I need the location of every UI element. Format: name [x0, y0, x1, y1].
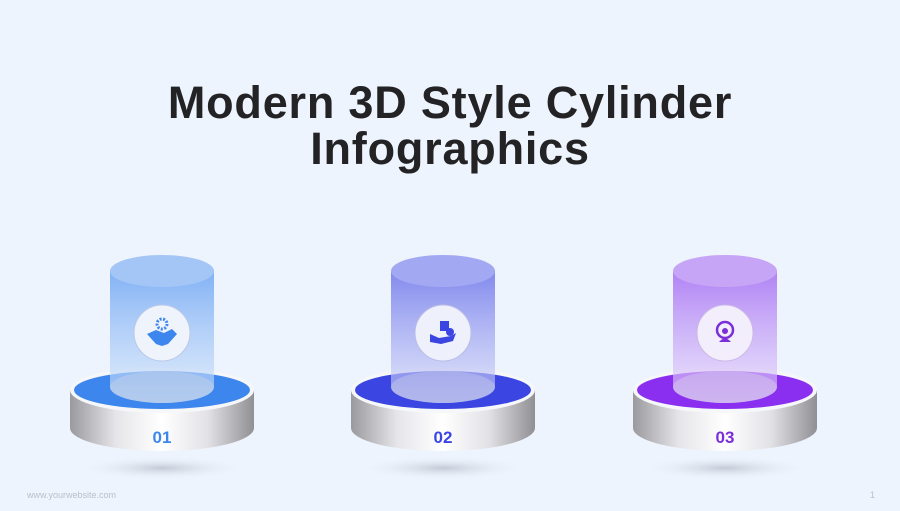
number 03: 03	[716, 428, 734, 447]
cylinder 01	[70, 255, 254, 480]
title	[168, 77, 732, 174]
cylinder 02	[351, 255, 535, 480]
number 02: 02	[434, 428, 452, 447]
number 01: 01	[153, 428, 171, 447]
title: Infographics	[310, 123, 590, 174]
title: Modern 3D Style Cylinder	[168, 77, 732, 128]
icon: handshake	[134, 305, 190, 361]
icon: coins in hand	[415, 305, 471, 361]
page number: 1	[870, 490, 875, 500]
cylinder 03	[633, 255, 817, 480]
icon: globe person	[697, 305, 753, 361]
footer website: www.yourwebsite.com	[26, 490, 116, 500]
